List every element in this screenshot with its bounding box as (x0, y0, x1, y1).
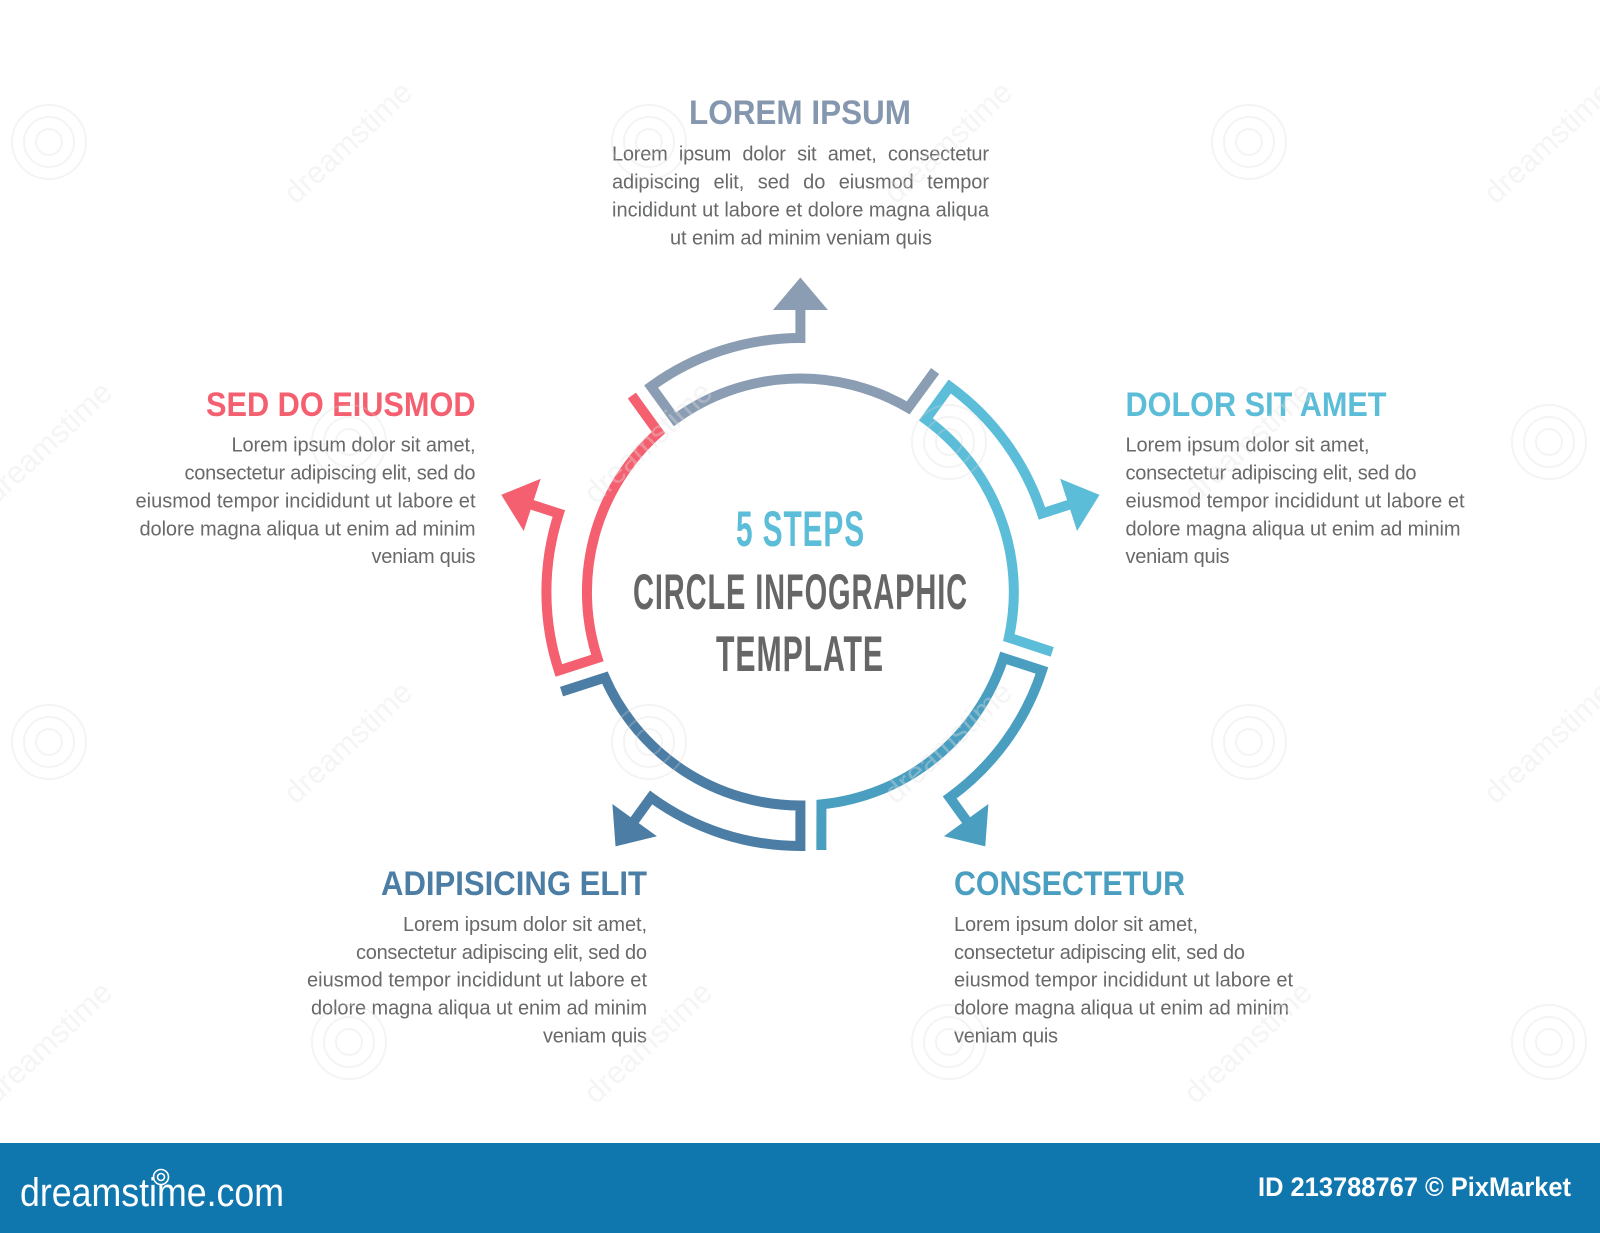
heading: sed do eiusmod: SED DO EIUSMOD (206, 386, 476, 424)
text block: lorem ipsum: Lorem ipsum dolor sit amet, consectetur (612, 144, 989, 166)
infographic canvas: dreamstime (1177, 374, 1319, 510)
text block: sed do eiusmod (136, 434, 476, 568)
heading: dolor sit amet: DOLOR SIT AMET (1126, 386, 1387, 424)
text block: dolor sit amet: consectetur adipiscing elit, sed do (1126, 462, 1416, 484)
text block: sed do eiusmod: dolore magna aliqua ut enim ad minim (140, 518, 476, 540)
text block: consectetur: veniam quis (954, 1026, 1058, 1048)
center title (633, 501, 968, 682)
circle step arrow: sed do eiusmod (red) (455, 367, 678, 681)
infographic canvas: dreamstime (1177, 974, 1319, 1110)
circle step arrow: consectetur (teal) (793, 644, 1106, 926)
text block: lorem ipsum: adipiscing elit, sed do eiusmod tempor (612, 172, 989, 194)
text block: lorem ipsum (612, 144, 990, 250)
footer bar (0, 1143, 1600, 1233)
text block: dolor sit amet: eiusmod tempor incididunt ut labore et (1126, 490, 1465, 512)
text block: sed do eiusmod: veniam quis (372, 546, 476, 568)
text block: adipisicing elit: dolore magna aliqua ut enim ad minim (311, 998, 647, 1020)
infographic canvas: dreamstime (277, 674, 419, 810)
text block: adipisicing elit: eiusmod tempor incididunt ut labore et (307, 970, 647, 992)
circle step arrow: dolor sit amet (light blue) (919, 353, 1141, 667)
text block: consectetur (954, 914, 1293, 1048)
infographic canvas: dreamstime (577, 374, 719, 510)
text block: sed do eiusmod: Lorem ipsum dolor sit amet, (232, 434, 476, 456)
circle step arrow: lorem ipsum (grey) (651, 278, 935, 419)
heading: consectetur: CONSECTETUR (954, 865, 1185, 903)
text block: dolor sit amet (1126, 434, 1465, 568)
infographic canvas: dreamstime (877, 674, 1019, 810)
footer logo text: dreamstime.com (20, 1171, 284, 1215)
text block: adipisicing elit: veniam quis (543, 1026, 647, 1048)
circle step arrow: adipisicing elit (dark blue) (507, 653, 820, 934)
text block: dolor sit amet: veniam quis (1126, 546, 1230, 568)
center title: CIRCLE INFOGRAPHIC (633, 564, 968, 620)
text block: adipisicing elit: consectetur adipiscing elit, sed do (356, 942, 647, 964)
icon: logo spiral (154, 1170, 168, 1184)
text block: sed do eiusmod: eiusmod tempor incididunt ut labore et (136, 490, 476, 512)
text block: sed do eiusmod: consectetur adipiscing elit, sed do (184, 462, 476, 484)
text block: lorem ipsum: ut enim ad minim veniam quis (670, 228, 932, 250)
text block: dolor sit amet: dolore magna aliqua ut enim ad minim (1126, 518, 1460, 540)
text block: adipisicing elit (307, 914, 647, 1048)
image id credit: ID 213788767 © PixMarket (1258, 1172, 1571, 1202)
center title: TEMPLATE (716, 626, 884, 682)
text block: consectetur: eiusmod tempor incididunt ut labore et (954, 970, 1293, 992)
infographic canvas: dreamstime (577, 974, 719, 1110)
center title: 5 STEPS (736, 501, 865, 557)
infographic canvas: dreamstime (877, 74, 1019, 210)
infographic canvas: dreamstime (277, 74, 419, 210)
heading: lorem ipsum: LOREM IPSUM (689, 94, 911, 132)
text block: consectetur: dolore magna aliqua ut enim ad minim (954, 998, 1289, 1020)
text block: adipisicing elit: Lorem ipsum dolor sit amet, (403, 914, 647, 936)
text block: consectetur: consectetur adipiscing elit, sed do (954, 942, 1245, 964)
text block: lorem ipsum: incididunt ut labore et dolore magna aliqua (612, 200, 990, 222)
text block: dolor sit amet: Lorem ipsum dolor sit amet, (1126, 434, 1370, 456)
text block: consectetur: Lorem ipsum dolor sit amet, (954, 914, 1198, 936)
heading: adipisicing elit: ADIPISICING ELIT (381, 865, 647, 903)
